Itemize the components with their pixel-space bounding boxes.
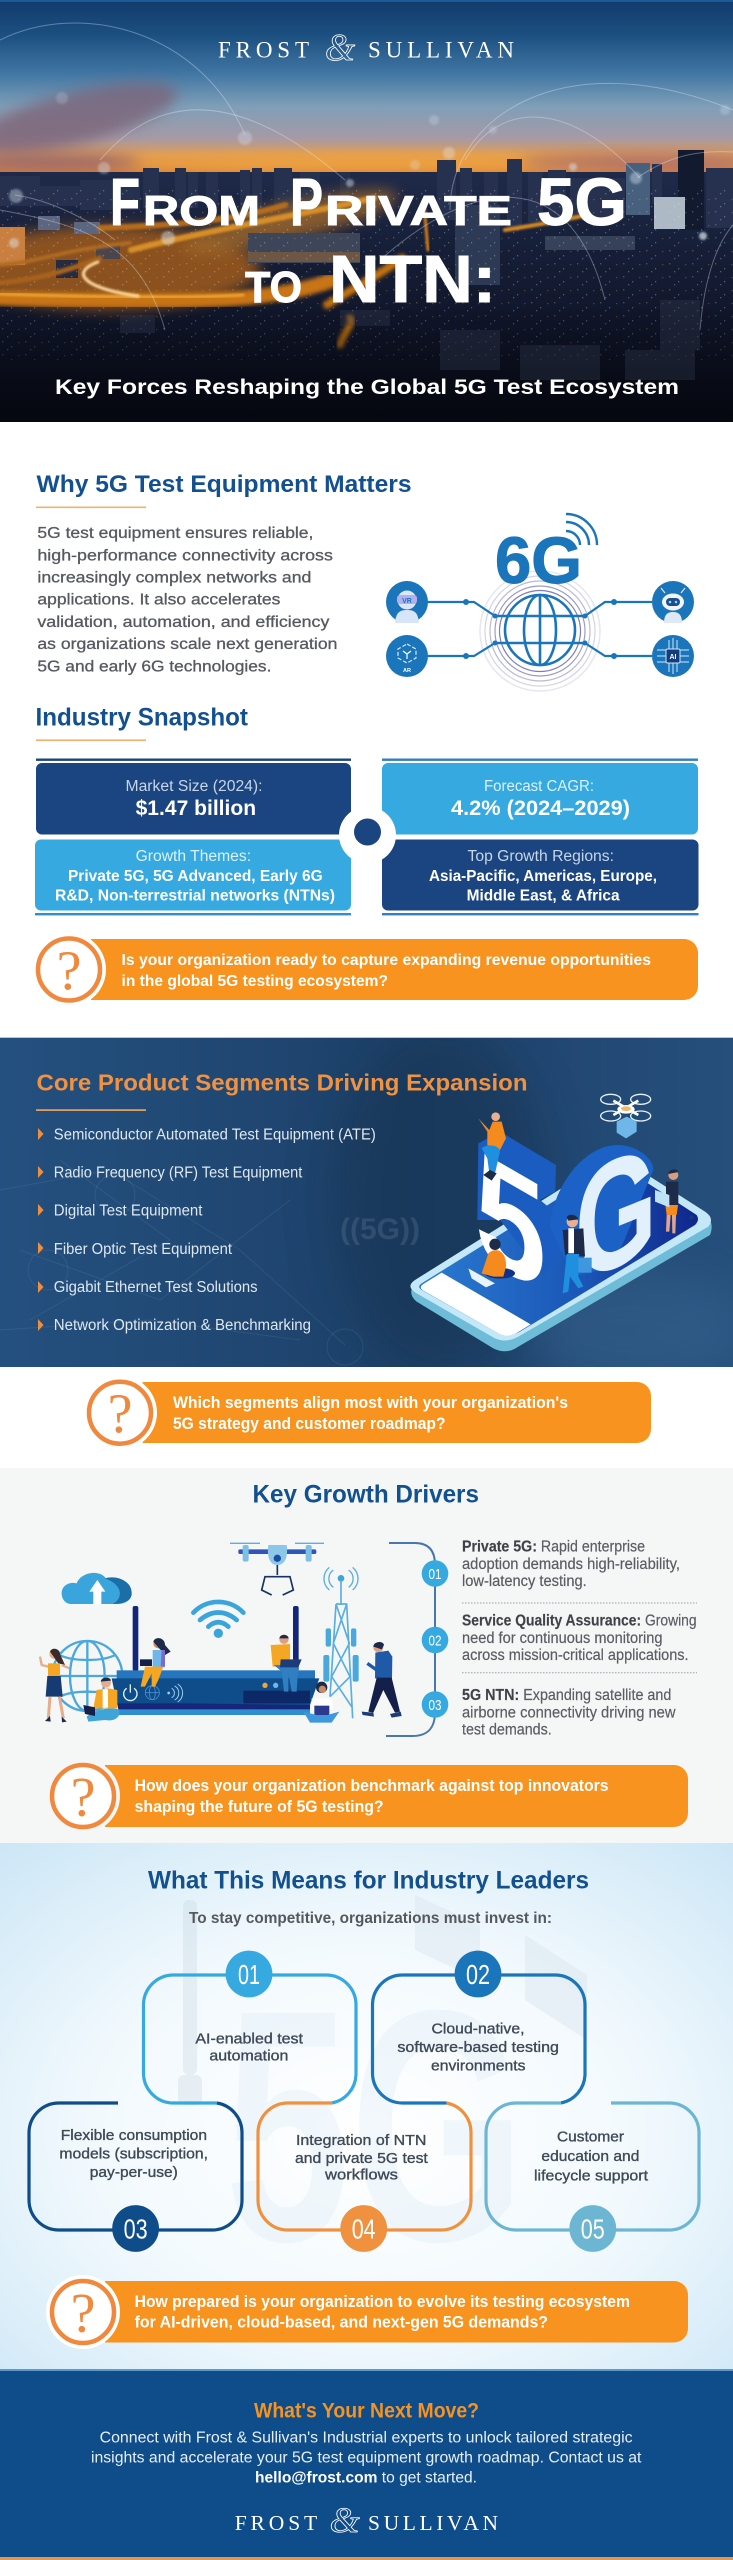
logo: Frost & Sullivan: SULLIVAN bbox=[368, 38, 514, 63]
callout: benchmarking bbox=[46, 1759, 688, 1833]
bracket connector bbox=[386, 1543, 435, 1736]
title: F bbox=[110, 165, 140, 240]
card 04: NTN integration: workflows bbox=[324, 2167, 398, 2184]
intro line: To stay competitive, organizations must invest in: bbox=[189, 1910, 552, 1927]
title: RIVATE bbox=[325, 187, 512, 234]
card 03: flexible consumption: models (subscription, bbox=[59, 2146, 208, 2163]
callout: revenue opportunities: ? bbox=[57, 940, 81, 1002]
card 03: flexible consumption: pay-per-use) bbox=[90, 2164, 178, 2181]
driver 01: private 5G bbox=[422, 1539, 680, 1590]
title: TO bbox=[245, 263, 302, 312]
card: market size: Market Size (2024): bbox=[126, 778, 262, 795]
callout: testing ecosystem: ? bbox=[71, 2282, 95, 2344]
driver 02: service quality assurance: Service Quality Assurance: Growing bbox=[462, 1613, 697, 1630]
logo: Frost & Sullivan: & bbox=[325, 27, 355, 69]
callout: revenue opportunities: Is your organization ready to capture expanding revenue opportunities bbox=[122, 952, 651, 969]
subtitle: Key Forces Reshaping the Global 5G Test Ecosystem bbox=[55, 376, 679, 399]
body paragraph: as organizations scale next generation bbox=[37, 636, 337, 653]
card: top growth regions: Middle East, & Africa bbox=[467, 888, 620, 905]
heading: why 5G test equipment matters: Why 5G Test Equipment Matters bbox=[36, 471, 412, 498]
card: top growth regions: Asia-Pacific, Americas, Europe, bbox=[429, 868, 657, 885]
faint background motif: 5G bbox=[225, 1941, 525, 2310]
skyline buildings bbox=[0, 150, 733, 232]
logo: Frost & Sullivan bbox=[218, 27, 514, 69]
card 05: customer education: lifecycle support bbox=[534, 2168, 649, 2185]
globe bbox=[52, 1641, 122, 1711]
card: growth themes: Growth Themes: bbox=[136, 848, 251, 865]
card 02: cloud-native testing: 02 bbox=[466, 1959, 490, 1990]
item: network optimization: Network Optimization & Benchmarking bbox=[54, 1317, 311, 1334]
card: forecast CAGR bbox=[382, 763, 698, 834]
cloud upload bbox=[62, 1573, 132, 1604]
walking man with phone bbox=[362, 1642, 402, 1718]
panel: what this means for industry leaders bbox=[0, 1843, 733, 2370]
woman on router with laptop bbox=[140, 1638, 171, 1687]
icon: VR user bbox=[386, 581, 428, 623]
panel: industry snapshot bbox=[32, 704, 698, 1006]
icon: AI chip: AI bbox=[670, 654, 677, 661]
heading: industry snapshot: Industry Snapshot bbox=[36, 704, 249, 732]
logo: Frost & Sullivan footer: & bbox=[330, 2500, 360, 2540]
darkening toward the bottom bbox=[0, 306, 733, 394]
card 02: cloud-native testing: Cloud-native, bbox=[432, 2020, 524, 2037]
antennas bbox=[133, 1606, 299, 1671]
title: 5G bbox=[537, 165, 627, 240]
phone bbox=[410, 1158, 712, 1351]
contact text: insights and accelerate your 5G test equipment growth roadmap. Contact us at bbox=[91, 2449, 642, 2466]
5G letters bbox=[475, 1111, 657, 1328]
faint background motif bbox=[178, 1895, 587, 2310]
card 04: NTN integration: and private 5G test bbox=[295, 2150, 429, 2167]
logo: Frost & Sullivan footer bbox=[235, 2500, 498, 2540]
panel: core product segments bbox=[0, 1025, 733, 1390]
callout: benchmarking: ? bbox=[71, 1766, 95, 1828]
icon: VR user: VR bbox=[402, 598, 412, 605]
seated man with laptop bbox=[83, 1678, 119, 1722]
globe bbox=[495, 595, 585, 665]
panel: why 5G test equipment matters bbox=[36, 471, 694, 691]
title: P bbox=[290, 165, 323, 240]
router body bbox=[112, 1670, 319, 1715]
heading: what this means: What This Means for Industry Leaders bbox=[148, 1866, 589, 1894]
product list bbox=[38, 1126, 376, 1334]
logo: Frost & Sullivan footer: SULLIVAN bbox=[368, 2511, 498, 2535]
warm glow of the interchange bbox=[0, 226, 260, 310]
icon: AR cube: AR bbox=[403, 668, 411, 674]
wifi signal bbox=[193, 1602, 243, 1636]
city lights bbox=[0, 190, 733, 360]
card 02: cloud-native testing: environments bbox=[431, 2058, 526, 2074]
walking man bbox=[563, 1215, 592, 1293]
body paragraph: applications. It also accelerates bbox=[37, 592, 281, 609]
callout: benchmarking: shaping the future of 5G testing? bbox=[135, 1798, 384, 1816]
card: market size bbox=[36, 763, 351, 834]
logo: Frost & Sullivan: FROST bbox=[218, 38, 309, 63]
logo: Frost & Sullivan footer: FROST bbox=[235, 2511, 317, 2535]
5G letters: 5 bbox=[475, 1115, 546, 1328]
card: growth themes: Private 5G, 5G Advanced, Early 6G bbox=[68, 868, 323, 885]
card: forecast CAGR: 4.2% (2024–2029) bbox=[451, 796, 630, 820]
card 04: NTN integration: Integration of NTN bbox=[296, 2132, 426, 2149]
callout: segments alignment bbox=[83, 1376, 651, 1450]
heading: key growth drivers: Key Growth Drivers bbox=[252, 1481, 479, 1509]
icon: robot bbox=[652, 581, 694, 623]
driver 03: 5G NTN: 03 bbox=[428, 1697, 442, 1714]
driver 02: service quality assurance bbox=[422, 1613, 697, 1664]
item: ATE: Semiconductor Automated Test Equipment (ATE) bbox=[54, 1126, 376, 1143]
item: digital: Digital Test Equipment bbox=[54, 1203, 203, 1220]
cross-legged woman bbox=[303, 1682, 339, 1723]
contact text: Connect with Frost & Sullivan's Industrial experts to unlock tailored strategic bbox=[100, 2430, 633, 2447]
circuit connectors bbox=[427, 602, 652, 656]
callout: segments alignment: 5G strategy and customer roadmap? bbox=[173, 1415, 446, 1433]
network arcs bbox=[0, 23, 733, 330]
card: market size: $1.47 billion bbox=[136, 796, 256, 820]
faint background motif bbox=[0, 1038, 724, 1367]
card 04: NTN integration bbox=[258, 2103, 471, 2252]
item: gigabit ethernet: Gigabit Ethernet Test Solutions bbox=[54, 1279, 258, 1296]
panel: what's your next move footer bbox=[0, 2369, 733, 2560]
body paragraph: high-performance connectivity across bbox=[37, 547, 333, 564]
driver 02: service quality assurance: 02 bbox=[428, 1632, 442, 1650]
card: top growth regions: Top Growth Regions: bbox=[468, 848, 614, 865]
callout: testing ecosystem: for AI-driven, cloud-based, and next-gen 5G demands? bbox=[135, 2314, 548, 2332]
body paragraph: increasingly complex networks and bbox=[37, 570, 311, 586]
body paragraph bbox=[37, 525, 337, 675]
callout: segments alignment: ? bbox=[108, 1383, 132, 1445]
illustration: 5G on smartphone bbox=[410, 1094, 712, 1351]
driver 02: service quality assurance: across mission-critical applications. bbox=[462, 1647, 689, 1664]
centre medallion bbox=[339, 806, 396, 864]
driver 03: 5G NTN: airborne connectivity driving new bbox=[462, 1704, 676, 1721]
icon: AI chip bbox=[652, 635, 694, 677]
card 03: flexible consumption: 03 bbox=[124, 2214, 148, 2244]
faint background motif: ((5G)) bbox=[340, 1213, 420, 1246]
callout: testing ecosystem: How prepared is your organization to evolve its testing ecosystem bbox=[135, 2293, 630, 2311]
delivery drone bbox=[601, 1094, 651, 1138]
driver 01: private 5G: low-latency testing. bbox=[462, 1573, 587, 1590]
callout: benchmarking: How does your organization benchmark against top innovators bbox=[135, 1777, 609, 1795]
driver 03: 5G NTN: test demands. bbox=[462, 1721, 552, 1738]
5G letters: G bbox=[575, 1111, 657, 1317]
6G label with signal waves: 6G bbox=[495, 523, 582, 597]
heading: core product segments: Core Product Segments Driving Expansion bbox=[36, 1070, 528, 1096]
panel: key growth drivers bbox=[0, 1468, 733, 1844]
card 01: AI-enabled test automation: automation bbox=[209, 2047, 288, 2064]
glowing highways bbox=[0, 198, 582, 345]
card 01: AI-enabled test automation: AI-enabled test bbox=[195, 2030, 304, 2048]
woman with tablet bbox=[655, 1169, 678, 1233]
body paragraph: 5G and early 6G technologies. bbox=[37, 658, 271, 675]
card 05: customer education: 05 bbox=[581, 2214, 605, 2244]
card 05: customer education: Customer bbox=[557, 2128, 624, 2146]
contact text bbox=[91, 2430, 642, 2486]
card 05: customer education bbox=[486, 2103, 699, 2252]
driver 02: service quality assurance: need for continuous monitoring bbox=[462, 1630, 662, 1647]
driver 03: 5G NTN: 5G NTN: Expanding satellite and bbox=[462, 1687, 671, 1704]
card 01: AI-enabled test automation: 01 bbox=[238, 1959, 260, 1990]
callout: revenue opportunities bbox=[32, 932, 698, 1006]
card: forecast CAGR: Forecast CAGR: bbox=[484, 778, 594, 795]
man on router with laptop bbox=[271, 1635, 302, 1692]
driver 03: 5G NTN bbox=[422, 1687, 676, 1738]
callout: revenue opportunities: in the global 5G testing ecosystem? bbox=[122, 973, 388, 990]
card 04: NTN integration: 04 bbox=[352, 2214, 376, 2244]
title: ROM bbox=[143, 187, 260, 234]
card 03: flexible consumption bbox=[29, 2103, 242, 2252]
contact text: hello@frost.com to get started. bbox=[255, 2469, 477, 2486]
panel: hero header bbox=[0, 0, 733, 422]
card 02: cloud-native testing bbox=[372, 1951, 585, 2103]
icon: AR cube bbox=[386, 635, 428, 677]
driver 01: private 5G: Private 5G: Rapid enterprise bbox=[462, 1539, 645, 1556]
illustration: 6G globe network bbox=[386, 514, 694, 691]
card: growth themes: R&D, Non-terrestrial networks (NTNs) bbox=[55, 888, 335, 905]
drone bbox=[230, 1543, 324, 1595]
body paragraph: 5G test equipment ensures reliable, bbox=[37, 525, 313, 542]
item: fiber optic: Fiber Optic Test Equipment bbox=[54, 1241, 233, 1258]
card: growth themes bbox=[35, 840, 351, 910]
network nodes bbox=[9, 92, 730, 248]
heading: next move: What's Your Next Move? bbox=[254, 2399, 479, 2422]
callout: segments alignment: Which segments align most with your organization's bbox=[173, 1394, 568, 1412]
concentric rings bbox=[480, 571, 600, 691]
card 01: AI-enabled test automation bbox=[144, 1951, 356, 2103]
woman taking selfie bbox=[40, 1649, 69, 1722]
card 05: customer education: education and bbox=[541, 2148, 639, 2165]
card 02: cloud-native testing: software-based testing bbox=[397, 2039, 559, 2056]
person with laptop bbox=[468, 1239, 515, 1287]
hero photo: city skyline at dusk bbox=[0, 0, 733, 422]
driver 01: private 5G: 01 bbox=[428, 1566, 442, 1583]
illustration: router with people bbox=[40, 1543, 402, 1723]
callout: testing ecosystem bbox=[46, 2275, 688, 2349]
title bbox=[110, 165, 627, 317]
body paragraph: validation, automation, and efficiency bbox=[37, 614, 330, 631]
card: top growth regions bbox=[382, 840, 698, 910]
title: NTN: bbox=[329, 242, 496, 317]
person on the 5 bbox=[478, 1112, 506, 1181]
antenna tower bbox=[323, 1567, 359, 1718]
item: RF: Radio Frequency (RF) Test Equipment bbox=[54, 1164, 303, 1182]
card 03: flexible consumption: Flexible consumption bbox=[61, 2127, 207, 2144]
driver 01: private 5G: adoption demands high-reliability, bbox=[462, 1556, 680, 1573]
